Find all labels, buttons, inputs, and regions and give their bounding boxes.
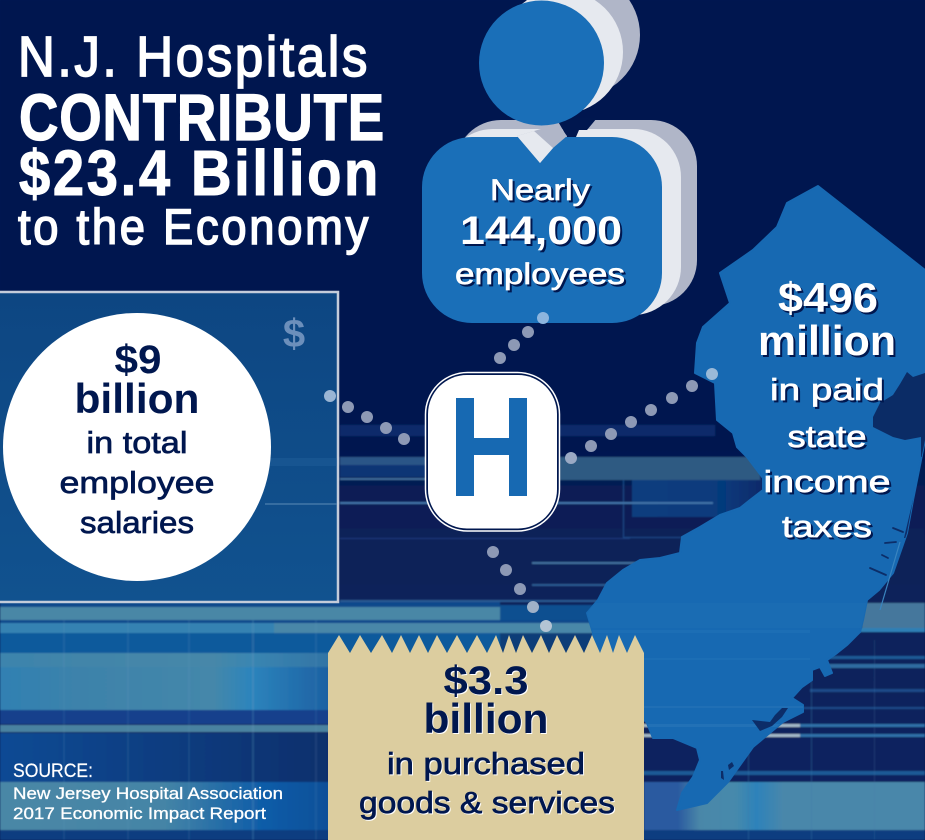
panel: purchased goods receipt	[328, 635, 644, 840]
source note: 2017 Economic Impact Report	[13, 804, 266, 823]
title	[18, 25, 385, 255]
goods text: $3.3	[444, 659, 528, 703]
title: to the Economy	[18, 199, 371, 255]
title: CONTRIBUTE	[19, 80, 385, 154]
goods text: billion	[424, 695, 548, 742]
connector dots: employees to H	[494, 312, 549, 364]
source note: SOURCE:	[13, 761, 93, 782]
callout: salaries circle: billion	[74, 375, 200, 422]
employees text: Nearly	[490, 174, 590, 207]
callout: state income taxes: in paid	[770, 372, 884, 407]
title: $23.4 Billion	[19, 137, 381, 209]
Raritan bay	[873, 372, 925, 457]
connector dots: taxes to H	[565, 368, 718, 464]
callout: salaries circle: salaries	[80, 505, 194, 540]
callout: state income taxes	[758, 274, 896, 544]
connector dots: goods to H	[487, 546, 552, 632]
icon: hospital H badge	[426, 372, 560, 531]
callout: salaries circle: in total	[86, 425, 188, 460]
goods text: in purchased	[387, 746, 585, 781]
employees text	[455, 174, 625, 291]
source note	[13, 761, 283, 823]
callout: state income taxes: taxes	[782, 509, 872, 544]
callout: state income taxes: $496	[778, 274, 878, 321]
callout: state income taxes: income	[764, 464, 890, 499]
callout: salaries circle: employee	[60, 465, 214, 500]
callout: state income taxes: state	[788, 419, 866, 454]
employees text: 144,000	[460, 209, 622, 253]
panel: salaries blue square	[0, 292, 338, 602]
source note: New Jersey Hospital Association	[13, 784, 283, 803]
callout: state income taxes: million	[758, 317, 896, 364]
goods text: goods & services	[359, 785, 615, 820]
callout: salaries circle: $9	[114, 338, 162, 382]
employees text: employees	[455, 258, 625, 291]
title: N.J. Hospitals	[18, 25, 370, 89]
icon: employee figure with layered shadow	[422, 0, 697, 323]
callout: salaries circle	[3, 313, 271, 581]
connector dots: salaries to H	[324, 390, 410, 445]
goods text	[359, 659, 615, 820]
coastal inlets	[870, 528, 903, 575]
icon: dollar sign: $	[283, 312, 305, 356]
New Jersey state map	[560, 186, 925, 810]
